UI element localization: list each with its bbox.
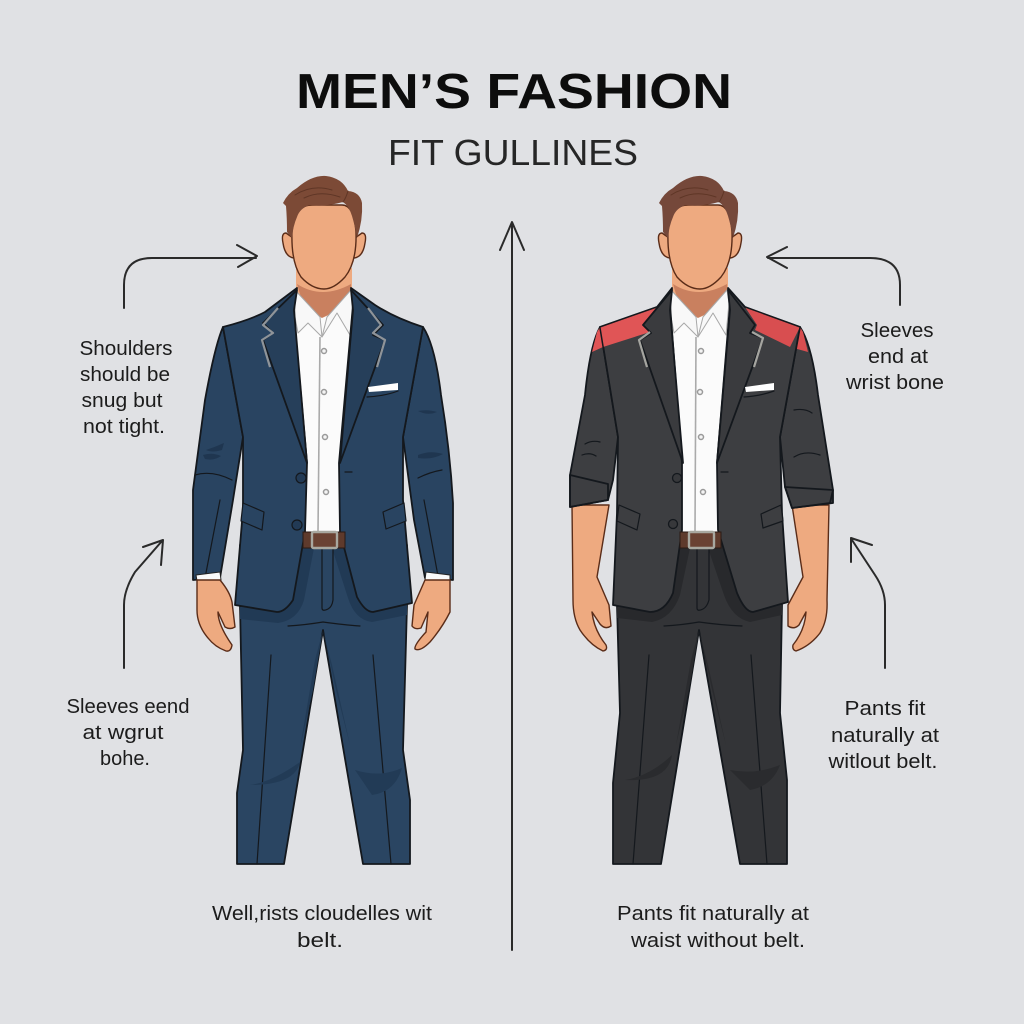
arrow: sleeves right	[767, 247, 900, 305]
forearms and hands: charcoal suit	[572, 505, 829, 651]
shirt: charcoal suit	[671, 290, 734, 532]
jacket: navy suit	[223, 288, 423, 612]
label: sleeves right	[845, 320, 944, 394]
hands: navy suit	[196, 572, 450, 651]
belt: charcoal suit	[680, 532, 721, 548]
figure: navy suit	[193, 176, 453, 864]
jacket: charcoal suit	[600, 288, 800, 612]
arrow: sleeves left	[124, 540, 163, 668]
label: sleeves left: at wgrut	[82, 722, 164, 744]
label: shoulders: snug but	[82, 390, 163, 412]
shirt: navy suit	[295, 290, 358, 532]
label: sleeves right: Sleeves	[860, 320, 934, 342]
arrow: shoulders left	[124, 245, 257, 308]
center divider arrow	[500, 222, 524, 950]
label: sleeves left: bohe.	[100, 748, 150, 770]
label: shoulders: should be	[80, 364, 170, 386]
flap pockets and buttons: navy suit	[241, 472, 406, 530]
trousers: navy suit	[237, 530, 410, 864]
belt: navy suit	[303, 532, 345, 548]
arrow: pants right	[851, 538, 885, 668]
title: MEN’S FASHION	[296, 65, 732, 119]
trousers: charcoal suit	[613, 530, 787, 864]
caption: left figure	[212, 903, 432, 952]
label: shoulders: not tight.	[83, 416, 165, 438]
figure: charcoal suit	[570, 176, 833, 864]
label: pants right	[827, 698, 939, 773]
caption: left figure: Well,rists cloudelles wit	[212, 903, 432, 925]
label: pants right: witlout belt.	[827, 751, 938, 773]
caption: right figure: waist without belt.	[630, 930, 805, 952]
label: shoulders: Shoulders	[80, 338, 172, 360]
caption: right figure	[617, 903, 809, 952]
head: navy suit figure	[282, 176, 366, 319]
caption: right figure: Pants fit naturally at	[617, 903, 809, 925]
sleeves: charcoal suit	[570, 307, 833, 508]
label: sleeves left	[66, 696, 190, 770]
label: shoulders	[80, 338, 172, 438]
caption: left figure: belt.	[297, 930, 343, 952]
label: sleeves right: wrist bone	[845, 372, 944, 394]
sleeves: navy suit	[193, 327, 453, 580]
label: pants right: Pants fit	[844, 698, 926, 720]
pocket square: navy suit	[367, 383, 398, 397]
subtitle: FIT GULLINES	[388, 132, 638, 173]
label: sleeves left: Sleeves eend	[66, 696, 190, 718]
flap pockets and buttons: charcoal suit	[617, 472, 783, 530]
label: sleeves right: end at	[868, 346, 928, 368]
label: pants right: naturally at	[831, 725, 939, 747]
head: charcoal suit figure	[658, 176, 742, 319]
pocket square: charcoal suit	[744, 383, 774, 397]
